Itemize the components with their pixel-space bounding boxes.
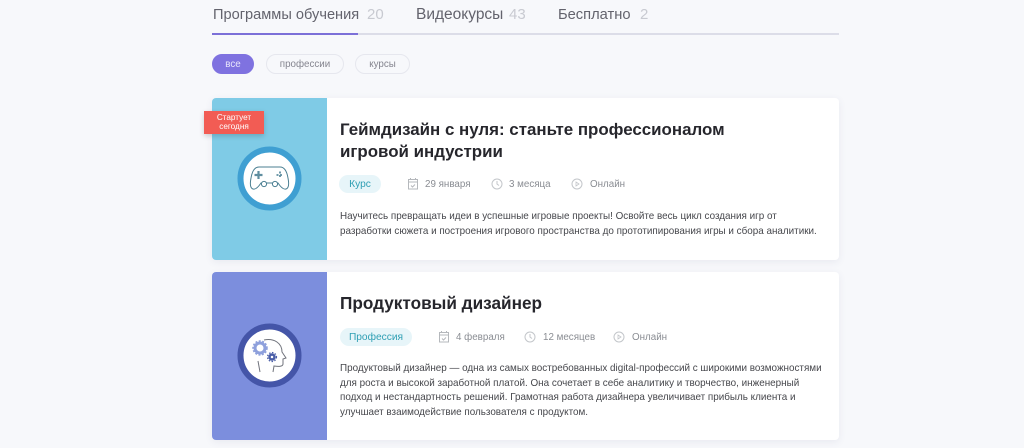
icon: play <box>572 178 582 190</box>
course title: Геймдизайн с нуля: станьте профессионалом <box>340 120 725 139</box>
tag: course: Курс <box>349 179 371 190</box>
tabs underline <box>212 33 839 35</box>
pill: all <box>212 54 254 74</box>
description: Научитесь превращать идеи в успешные игровые проекты! Освойте весь цикл создания игр от <box>340 211 777 222</box>
badge: starts today: сегодня <box>219 122 249 130</box>
tab count: programs: 20 <box>367 6 384 23</box>
tab: video courses: Видеокурсы <box>416 6 503 23</box>
card image panel <box>212 272 327 440</box>
description: улучшает взаимодействие пользователя с продуктом. <box>340 406 588 418</box>
description <box>340 211 817 236</box>
pill: professions <box>266 54 344 74</box>
date: 29 января <box>425 179 471 190</box>
icon: clock <box>524 332 536 342</box>
tab count: video: 43 <box>509 6 526 23</box>
pill: courses: курсы <box>369 59 396 70</box>
pill: all: все <box>225 59 241 70</box>
description <box>340 363 822 418</box>
card: game design <box>212 98 839 260</box>
icon: head with gears <box>238 324 302 388</box>
badge: starts today: Стартует <box>217 113 251 122</box>
icon: calendar <box>408 178 418 190</box>
course title: игровой индустрии <box>340 142 503 161</box>
tab: programs: Программы обучения <box>213 7 359 23</box>
course title <box>340 120 725 161</box>
format: Онлайн <box>632 332 667 343</box>
icon: play <box>614 332 624 342</box>
duration: 3 месяца <box>509 179 551 190</box>
card image panel <box>212 98 327 260</box>
tabs <box>212 6 839 35</box>
tab: free: Бесплатно <box>558 7 631 23</box>
tab count: free: 2 <box>640 6 648 23</box>
badge: starts today <box>204 111 264 134</box>
pill: professions: профессии <box>280 59 330 70</box>
card: product designer <box>212 272 839 440</box>
tag: profession: Профессия <box>349 332 403 343</box>
date: 4 февраля <box>456 332 505 343</box>
pill: courses <box>355 54 410 74</box>
icon: calendar <box>439 331 449 342</box>
description: подход и нестандартность решений. Грамотная работа дизайнера увеличивает прибыль клиента и <box>340 392 795 403</box>
description: Продуктовый дизайнер — одна из самых востребованных digital-профессий с широкими возможностями <box>340 363 822 374</box>
format: Онлайн <box>590 179 625 190</box>
tag: course <box>339 175 381 193</box>
tag: profession <box>340 328 412 346</box>
icon: gamepad <box>238 146 302 210</box>
filter pills <box>212 54 410 74</box>
description: разработки сюжета и построения игрового пространства до прототипирования игры и сбора аналитики. <box>340 226 817 236</box>
duration: 12 месяцев <box>543 332 595 343</box>
description: для роста и высокой заработной платой. Она сочетает в себе аналитику и творчество, инженерный <box>340 378 799 388</box>
icon: clock <box>492 178 502 190</box>
course title: Продуктовый дизайнер <box>340 293 542 313</box>
